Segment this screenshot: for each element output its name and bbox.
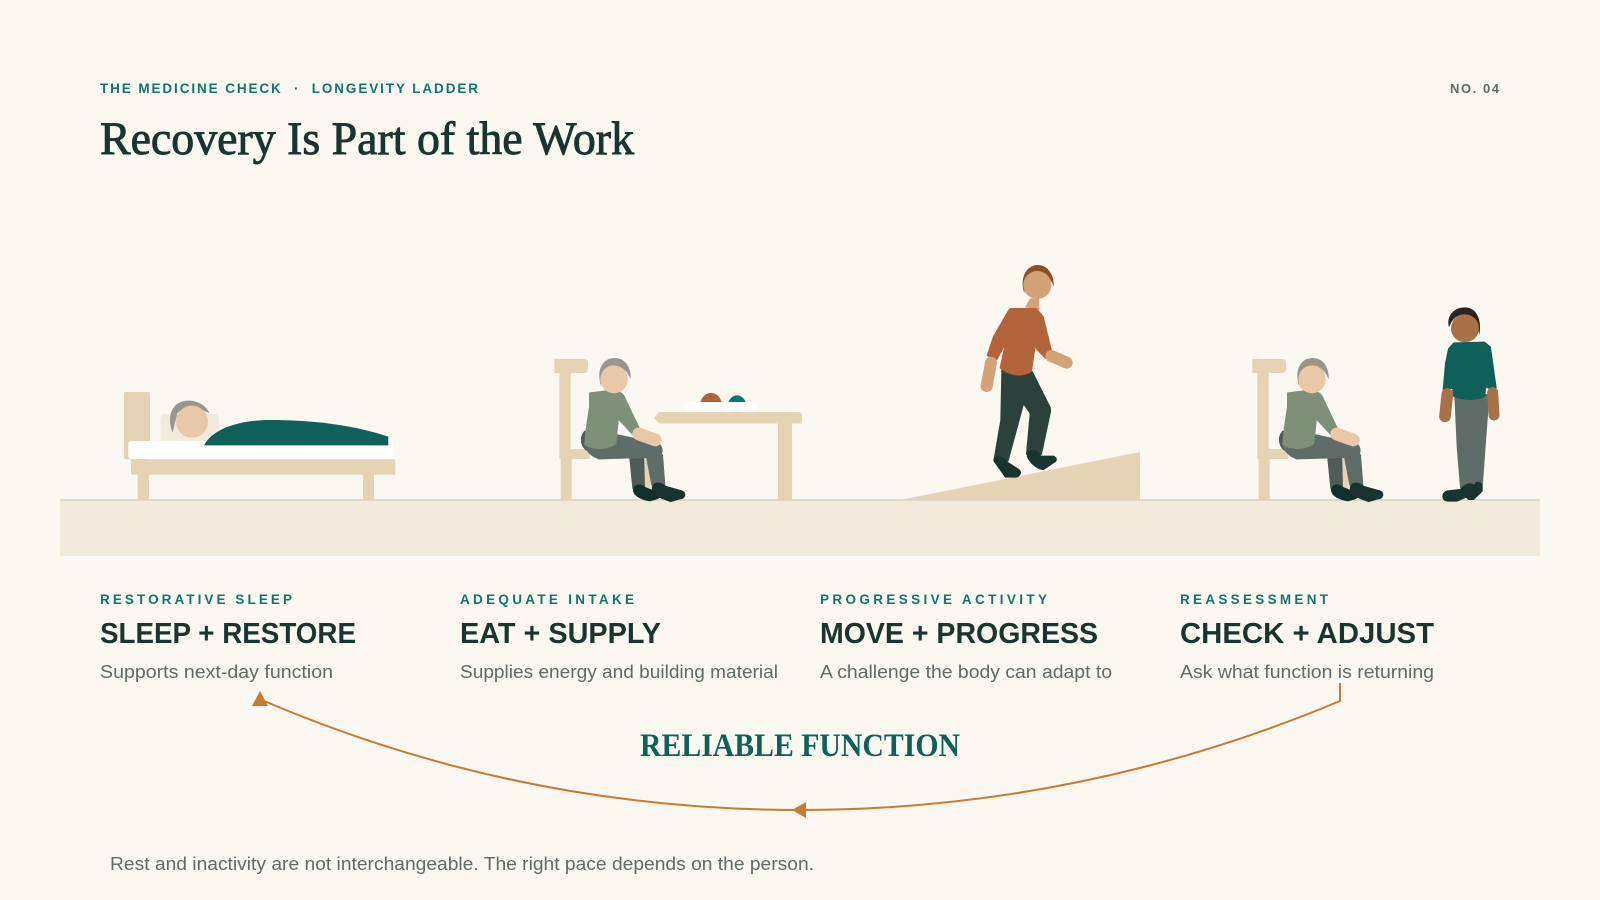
hair [1297, 358, 1329, 386]
seated person [582, 358, 684, 501]
scene: reassessment seated [1252, 358, 1382, 501]
ground band [60, 499, 1540, 556]
feedback loop arrow [252, 683, 1340, 818]
ramp [903, 452, 1140, 500]
hip shadow [582, 432, 617, 458]
shoes [1443, 483, 1482, 501]
description: Ask what function is returning [1180, 662, 1434, 682]
footnote: Rest and inactivity are not interchangeable. The right pace depends on the person. [110, 854, 814, 874]
right curve [800, 683, 1340, 810]
walking person [987, 265, 1067, 477]
center label: RELIABLE FUNCTION [640, 728, 960, 764]
header eyebrow: THE MEDICINE CHECK · LONGEVITY LADDER [100, 81, 478, 96]
front lower leg [647, 455, 664, 485]
sweater [1283, 391, 1337, 448]
category label: PROGRESSIVE ACTIVITY [820, 592, 1047, 607]
hip shadow [1280, 432, 1315, 458]
table [654, 412, 802, 500]
issue number: NO. 04 [1450, 81, 1500, 96]
back lower leg [630, 455, 644, 488]
plate [684, 402, 758, 412]
title: Recovery Is Part of the Work [100, 113, 634, 165]
heading: MOVE + PROGRESS [820, 618, 1098, 650]
arrowhead: end [252, 691, 268, 706]
arm left [987, 363, 991, 386]
scene: standing person [1443, 307, 1496, 501]
sweater [1444, 343, 1496, 399]
head [1298, 365, 1326, 393]
arm left [1445, 394, 1447, 416]
category label: ADEQUATE INTAKE [460, 592, 634, 607]
scene: eating at table [554, 358, 802, 501]
sleeper head [176, 406, 208, 438]
back lower leg [1328, 455, 1342, 488]
hair [1448, 307, 1480, 335]
column: reassessment [1180, 592, 1434, 682]
column: intake [460, 592, 778, 682]
chair [554, 359, 651, 500]
blanket [204, 420, 388, 445]
front shoe [653, 484, 684, 501]
hand and forearm [1337, 434, 1353, 440]
column: activity [820, 592, 1112, 682]
mattress [128, 441, 394, 459]
description: A challenge the body can adapt to [820, 662, 1112, 682]
shirt [988, 309, 1051, 374]
trousers [1455, 395, 1487, 487]
arm right [1051, 356, 1067, 363]
chair [1252, 359, 1349, 500]
arm right [1493, 393, 1494, 415]
back shoe [1332, 485, 1358, 500]
category label: RESTORATIVE SLEEP [100, 592, 292, 607]
sweater [585, 391, 639, 448]
arrowhead: middle [792, 802, 806, 818]
column: sleep [100, 592, 356, 682]
seated person [1280, 358, 1382, 501]
front shoe [1351, 484, 1382, 501]
scene: progressive activity [903, 265, 1140, 500]
food dome: teal [728, 395, 746, 403]
hand and forearm [639, 434, 655, 440]
head [1023, 271, 1051, 299]
thigh [585, 435, 662, 458]
neck [1025, 298, 1039, 310]
scene: sleep in bed [124, 392, 395, 499]
sleeper hair [170, 401, 209, 433]
heading: SLEEP + RESTORE [100, 618, 356, 650]
description: Supports next-day function [100, 662, 333, 682]
heading: EAT + SUPPLY [460, 618, 661, 650]
food dome: orange [700, 393, 722, 403]
head [1451, 314, 1479, 342]
pillow [160, 414, 219, 445]
bed frame [131, 459, 395, 499]
trousers [994, 369, 1050, 461]
hair [599, 358, 631, 386]
left curve [264, 701, 800, 810]
hair [1023, 265, 1054, 293]
headboard [124, 392, 150, 459]
description: Supplies energy and building material [460, 662, 778, 682]
back shoe [634, 485, 660, 500]
category label: REASSESSMENT [1180, 592, 1329, 607]
thigh [1283, 435, 1360, 458]
front lower leg [1345, 455, 1362, 485]
shoes [994, 451, 1056, 477]
heading: CHECK + ADJUST [1180, 618, 1434, 650]
head [600, 365, 628, 393]
